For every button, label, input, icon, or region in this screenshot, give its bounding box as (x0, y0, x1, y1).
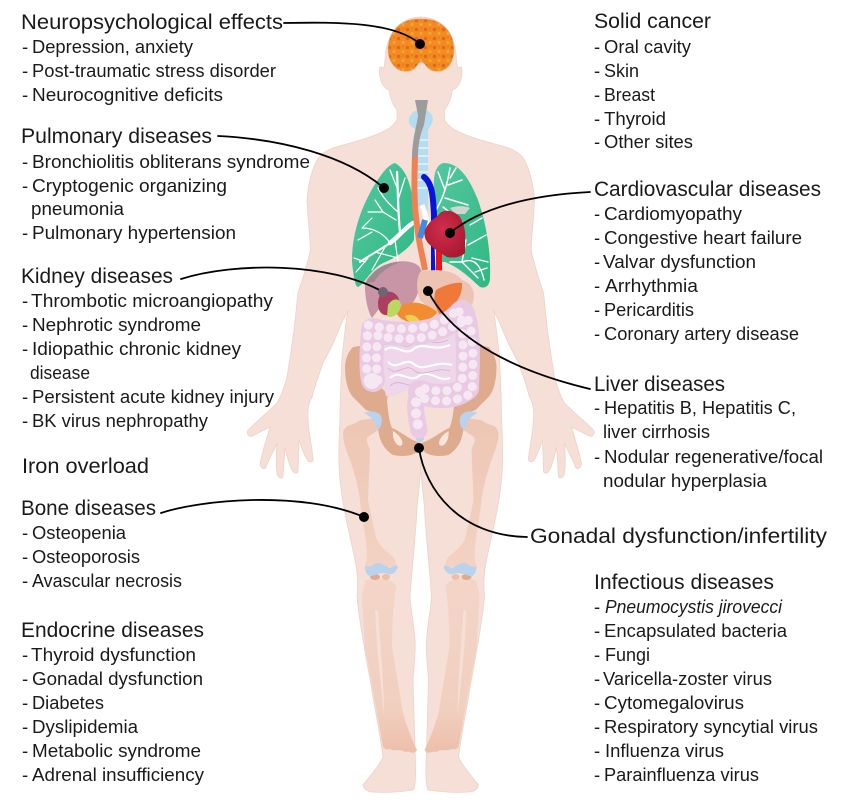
body silhouette (247, 17, 594, 792)
text block: kidney diseases: - (22, 410, 28, 431)
text block: infectious diseases: - (594, 692, 600, 713)
text block: solid cancer (594, 9, 711, 152)
text block: kidney diseases: Nephrotic syndrome (32, 314, 201, 335)
text block: liver diseases: Liver diseases (594, 372, 725, 396)
text block: kidney diseases: Kidney diseases (21, 264, 173, 288)
text block: cardiovascular diseases: - (594, 227, 600, 248)
text block: bone diseases: Bone diseases (21, 496, 156, 520)
text block: bone diseases (21, 496, 182, 591)
text block: endocrine diseases: Endocrine diseases (21, 618, 204, 642)
text block: solid cancer: Oral cavity (604, 36, 692, 57)
text block: liver diseases: - (594, 397, 600, 418)
text block: infectious diseases: Varicella-zoster virus (603, 668, 772, 689)
text block: kidney diseases: BK virus nephropathy (32, 410, 209, 431)
text block: liver diseases: Hepatitis B, Hepatitis C, (604, 397, 796, 418)
text block: infectious diseases: - (594, 644, 600, 665)
text block: liver diseases: liver cirrhosis (603, 421, 710, 442)
text block: liver diseases: Nodular regenerative/focal (604, 446, 823, 467)
text block: infectious diseases: - (594, 716, 600, 737)
brain (388, 19, 454, 71)
text block: liver diseases: - (594, 446, 600, 467)
text block: solid cancer: Breast (604, 84, 655, 105)
text block: kidney diseases: Idiopathic chronic kidney (32, 338, 242, 359)
text block: cardiovascular diseases: Cardiomyopathy (604, 203, 743, 224)
text block: endocrine diseases: - (22, 764, 28, 785)
text block: solid cancer: - (594, 60, 600, 81)
text block: infectious diseases: - (594, 596, 600, 617)
text block: cardiovascular diseases: - (594, 251, 600, 272)
text block: kidney diseases: - (22, 314, 28, 335)
line: pulmonary diseases to lung (218, 136, 384, 188)
text block: kidney diseases: Thrombotic microangiopathy (31, 290, 274, 311)
text block: pulmonary diseases: Cryptogenic organizing (32, 175, 227, 196)
text block: cardiovascular diseases: - (594, 299, 600, 320)
text block: pulmonary diseases: Bronchiolitis obliterans syndrome (32, 151, 310, 172)
text block: kidney diseases (21, 264, 275, 431)
text block: endocrine diseases (21, 618, 205, 785)
text block: bone diseases: - (22, 570, 28, 591)
text block: solid cancer: - (594, 131, 600, 152)
text block: bone diseases: Osteopenia (32, 522, 127, 543)
text block: cardiovascular diseases: Arrhythmia (605, 275, 699, 296)
great vessels (420, 177, 439, 272)
heart (424, 211, 465, 258)
text block: liver diseases: nodular hyperplasia (603, 470, 768, 491)
text block: neuropsychological effects (21, 10, 283, 105)
text block: solid cancer: Other sites (604, 131, 693, 152)
text block: neuropsychological effects: - (22, 60, 28, 81)
line: liver diseases to liver (428, 291, 590, 389)
stomach and digestive organs (378, 270, 474, 323)
text block: solid cancer: Solid cancer (594, 9, 711, 33)
small intestine (380, 334, 456, 396)
text block: infectious diseases: Parainfluenza virus (604, 764, 759, 785)
text block: kidney diseases: - (22, 386, 28, 407)
dots (359, 39, 455, 522)
text block: bone diseases: Osteoporosis (32, 546, 140, 567)
text block: neuropsychological effects: Neurocognitive deficits (32, 84, 223, 105)
text block: neuropsychological effects: - (22, 84, 28, 105)
text block: bone diseases: Avascular necrosis (32, 570, 182, 591)
text block: cardiovascular diseases: - (594, 323, 600, 344)
text block: solid cancer: - (594, 108, 600, 129)
text block: infectious diseases: - (594, 740, 600, 761)
text block: endocrine diseases: Gonadal dysfunction (32, 668, 203, 689)
text block: cardiovascular diseases: Congestive heart failure (604, 227, 802, 248)
oesophagus (412, 100, 428, 270)
text block: infectious diseases: Encapsulated bacteria (604, 620, 788, 641)
text block: cardiovascular diseases: - (594, 275, 600, 296)
text block: endocrine diseases: - (22, 668, 28, 689)
liver (365, 261, 422, 318)
heading: iron overload: Iron overload (22, 454, 149, 478)
text block: cardiovascular diseases: Pericarditis (604, 299, 694, 320)
line: bone diseases to femur (161, 500, 364, 517)
text block: endocrine diseases: Thyroid dysfunction (31, 644, 196, 665)
text block: infectious diseases: - (594, 620, 600, 641)
joints (364, 411, 478, 576)
text block: pulmonary diseases: - (22, 222, 28, 243)
text block: neuropsychological effects: - (22, 36, 28, 57)
text block: neuropsychological effects: Depression, anxiety (32, 36, 194, 57)
text block: solid cancer: - (594, 36, 600, 57)
text block: cardiovascular diseases: Coronary artery disease (604, 323, 799, 344)
text block: pulmonary diseases: Pulmonary hypertension (32, 222, 236, 243)
line: gonadal dysfunction to pelvis (419, 448, 527, 537)
human body illustration (247, 17, 594, 792)
text block: infectious diseases (594, 570, 818, 785)
text block: endocrine diseases: Adrenal insufficiency (32, 764, 205, 785)
pelvis (345, 345, 496, 456)
text block: endocrine diseases: - (22, 644, 28, 665)
text block: infectious diseases: Pneumocystis jirovecci (605, 596, 783, 617)
text block: endocrine diseases: Diabetes (32, 692, 104, 713)
leader lines (161, 23, 590, 537)
text block: pulmonary diseases: pneumonia (31, 198, 125, 219)
text block: liver diseases (594, 372, 823, 491)
text block: infectious diseases: Infectious diseases (594, 570, 774, 594)
text block: pulmonary diseases: Pulmonary diseases (21, 124, 212, 148)
text block: infectious diseases: - (594, 764, 600, 785)
text block: infectious diseases: Cytomegalovirus (604, 692, 744, 713)
text block: bone diseases: - (22, 546, 28, 567)
text block: cardiovascular diseases (594, 177, 821, 344)
text block: pulmonary diseases: - (22, 175, 28, 196)
text block: endocrine diseases: - (22, 740, 28, 761)
text block: kidney diseases: disease (30, 362, 90, 383)
trachea (409, 110, 433, 212)
text block: cardiovascular diseases: Valvar dysfunction (603, 251, 756, 272)
text block: pulmonary diseases: - (22, 151, 28, 172)
text block: endocrine diseases: - (22, 716, 28, 737)
large intestine (364, 308, 473, 430)
text block: endocrine diseases: Metabolic syndrome (32, 740, 201, 761)
line: neuropsychological effects to brain (284, 23, 420, 44)
text block: kidney diseases: - (22, 290, 28, 311)
lungs (352, 163, 490, 288)
text block: infectious diseases: - (594, 668, 600, 689)
text block: solid cancer: - (594, 84, 600, 105)
text block: cardiovascular diseases: - (594, 203, 600, 224)
text block: solid cancer: Thyroid (604, 108, 666, 129)
text block: kidney diseases: - (22, 338, 28, 359)
text block: solid cancer: Skin (604, 60, 639, 81)
text block: endocrine diseases: - (22, 692, 28, 713)
text block: infectious diseases: Fungi (605, 644, 650, 665)
text block: pulmonary diseases (21, 124, 310, 243)
heading: gonadal dysfunction/infertility: Gonadal dysfunction/infertility (530, 524, 827, 548)
text block: neuropsychological effects: Post-traumatic stress disorder (32, 60, 276, 81)
text block: infectious diseases: Respiratory syncytial virus (604, 716, 818, 737)
text block: cardiovascular diseases: Cardiovascular diseases (594, 177, 821, 201)
line: cardiovascular diseases to heart (450, 192, 590, 233)
leg bones (343, 418, 498, 753)
text block: endocrine diseases: Dyslipidemia (32, 716, 139, 737)
text block: neuropsychological effects: Neuropsychological effects (21, 10, 283, 34)
line: kidney diseases to kidney (181, 268, 383, 292)
text block: bone diseases: - (22, 522, 28, 543)
text block: infectious diseases: Influenza virus (605, 740, 724, 761)
text block: kidney diseases: Persistent acute kidney injury (32, 386, 275, 407)
